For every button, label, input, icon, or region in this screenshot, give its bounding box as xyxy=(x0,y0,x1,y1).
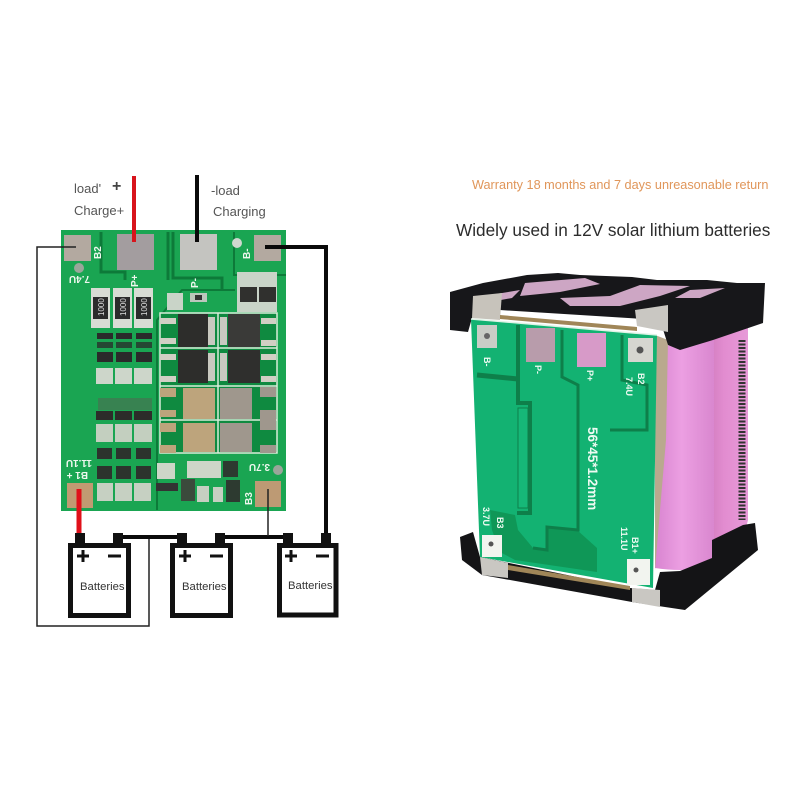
battery 1 xyxy=(70,533,128,616)
board silkscreen labels xyxy=(66,246,270,505)
solder pads xyxy=(64,234,281,508)
pcb labels: 3.7U xyxy=(481,507,491,526)
resistors: 1000 xyxy=(97,298,106,316)
barcode xyxy=(738,340,746,520)
panel: wiring diagram xyxy=(37,175,336,626)
circuit board xyxy=(61,230,286,511)
pcb labels: P- xyxy=(533,365,543,374)
label: load plus: load' xyxy=(74,181,101,196)
board silkscreen labels: B2 xyxy=(93,246,104,259)
control chips xyxy=(96,333,152,501)
back cell xyxy=(700,325,748,548)
pads xyxy=(477,325,497,348)
bottom cell holder xyxy=(460,523,758,610)
small components xyxy=(74,238,283,502)
board silkscreen labels: B3 xyxy=(244,492,255,505)
board silkscreen labels: 11.1U xyxy=(66,457,92,468)
heading: Widely used in 12V solar lithium batteries xyxy=(456,220,770,240)
warranty text: Warranty 18 months and 7 days unreasonable return xyxy=(472,178,768,192)
panel: battery pack photo xyxy=(450,273,765,610)
tape behind board xyxy=(655,335,668,570)
battery 2: Batteries xyxy=(182,581,227,593)
pcb xyxy=(471,319,657,588)
battery 1: Batteries xyxy=(80,581,125,593)
resistors xyxy=(91,272,277,328)
pcb labels: 7.4U xyxy=(624,377,634,396)
label: load minus: -load xyxy=(211,183,240,198)
battery 2 xyxy=(172,533,230,616)
pcb labels: 11.1U xyxy=(619,527,629,551)
pcb labels xyxy=(481,357,646,554)
battery 3 xyxy=(280,533,336,615)
pcb labels: B1+ xyxy=(630,537,640,554)
board silkscreen labels: P- xyxy=(190,278,201,288)
pcb labels: P+ xyxy=(585,370,595,381)
pcb labels: B3 xyxy=(495,517,505,529)
label: charging minus: Charging xyxy=(213,204,266,219)
pcb labels: B- xyxy=(482,357,492,366)
board silkscreen labels: 3.7U xyxy=(249,461,270,472)
battery 3: Batteries xyxy=(288,580,333,592)
board silkscreen labels: B- xyxy=(242,248,253,259)
pcb labels: 56*45*1.2mm xyxy=(585,427,600,510)
board silkscreen labels: B1 + xyxy=(66,469,88,480)
front cell xyxy=(655,340,714,570)
board silkscreen labels: 7.4U xyxy=(69,273,90,284)
label: load plus: + xyxy=(112,178,121,195)
resistors: 1000 xyxy=(140,298,149,316)
resistors: 1000 xyxy=(119,298,128,316)
board silkscreen labels: P+ xyxy=(130,274,141,287)
wires xyxy=(37,175,326,626)
pcb labels: B2 xyxy=(636,373,646,385)
top cell holder xyxy=(450,273,765,350)
label: charge plus: Charge+ xyxy=(74,203,124,218)
MOSFET block xyxy=(160,313,277,453)
